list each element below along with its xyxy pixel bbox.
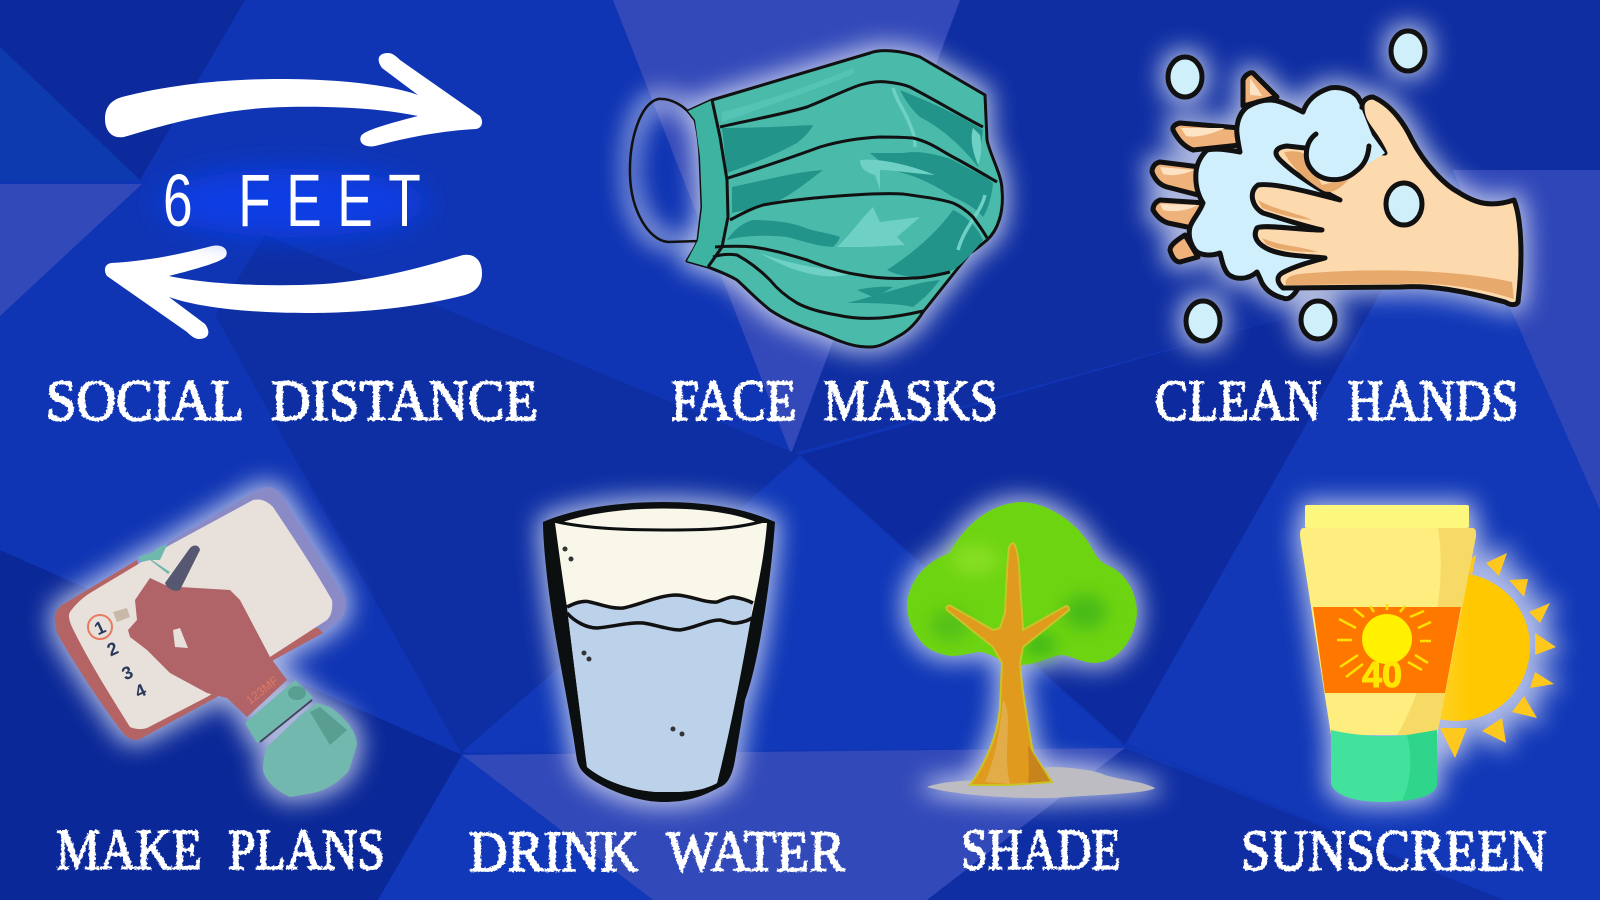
icon: arrow right (105, 53, 482, 146)
tree crown (907, 502, 1137, 665)
list numbers (91, 617, 149, 702)
planner page (69, 499, 332, 729)
mask highlights (760, 128, 981, 276)
beige tab (113, 608, 130, 622)
panel: face mask (630, 51, 1002, 347)
fist (263, 703, 357, 797)
label: shade: SHADE (961, 817, 1121, 882)
back hand fingers (1152, 73, 1277, 262)
red circle (88, 615, 112, 639)
text: 6 feet: 6 FEET (163, 159, 421, 242)
text glow (157, 169, 427, 237)
fist shadow (310, 707, 347, 745)
tube side shade (1397, 528, 1476, 735)
label: social distance: SOCIAL DISTANCE (46, 368, 538, 433)
foam ball (1306, 100, 1385, 180)
glass black silhouette (543, 502, 775, 802)
ground (927, 767, 1155, 798)
crown shading (1063, 594, 1107, 630)
paper gap in hand (173, 628, 188, 648)
list numbers: 3 (119, 662, 136, 684)
label: sunscreen: SUNSCREEN (1241, 818, 1547, 883)
water (567, 595, 753, 792)
label: clean hands: CLEAN HANDS (1155, 368, 1519, 433)
label sun rays (1337, 604, 1431, 677)
label: face masks: FACE MASKS (671, 368, 998, 433)
tube body (1300, 528, 1476, 735)
label: drink water: DRINK WATER (469, 819, 845, 884)
trunk highlights (985, 700, 1010, 784)
front hand (1252, 97, 1521, 305)
sun rays (1440, 553, 1556, 758)
panel: social distance (105, 53, 482, 339)
ear loop (630, 99, 699, 242)
planner cover purple (167, 487, 346, 657)
teal clip (138, 545, 170, 574)
panel: clean hands (1152, 31, 1521, 341)
panel: drink water (543, 502, 775, 802)
finger highlights (1160, 78, 1262, 211)
mask side strip (687, 100, 728, 267)
planner red cover (55, 560, 323, 740)
hand (128, 578, 287, 717)
water surface lines (567, 595, 753, 630)
sleeve (245, 680, 313, 743)
orange band (1313, 607, 1461, 693)
icon: arrow left (105, 246, 482, 339)
pen (165, 546, 200, 591)
bubbles (1168, 31, 1425, 341)
list numbers: 4 (132, 680, 149, 702)
green base (1331, 730, 1437, 802)
wrist text: 123MF (243, 673, 281, 707)
mask dark pleats (722, 90, 993, 307)
soap foam (1189, 87, 1390, 299)
list numbers: 2 (104, 638, 121, 660)
label: make plans: MAKE PLANS (56, 817, 385, 882)
mask pleat lines (708, 82, 997, 318)
hand shading (1258, 151, 1514, 299)
mask body (687, 51, 1002, 347)
specks (562, 546, 684, 736)
panel: shade (907, 502, 1155, 798)
trunk (946, 543, 1069, 785)
panel: make plans (55, 487, 357, 797)
sun (1382, 573, 1530, 721)
glass interior (555, 523, 767, 792)
panel: sunscreen (1300, 505, 1556, 802)
glass rim (558, 507, 760, 530)
tube cap (1305, 505, 1469, 528)
list numbers: 1 (91, 617, 109, 639)
spf number: 40 (1362, 654, 1402, 695)
